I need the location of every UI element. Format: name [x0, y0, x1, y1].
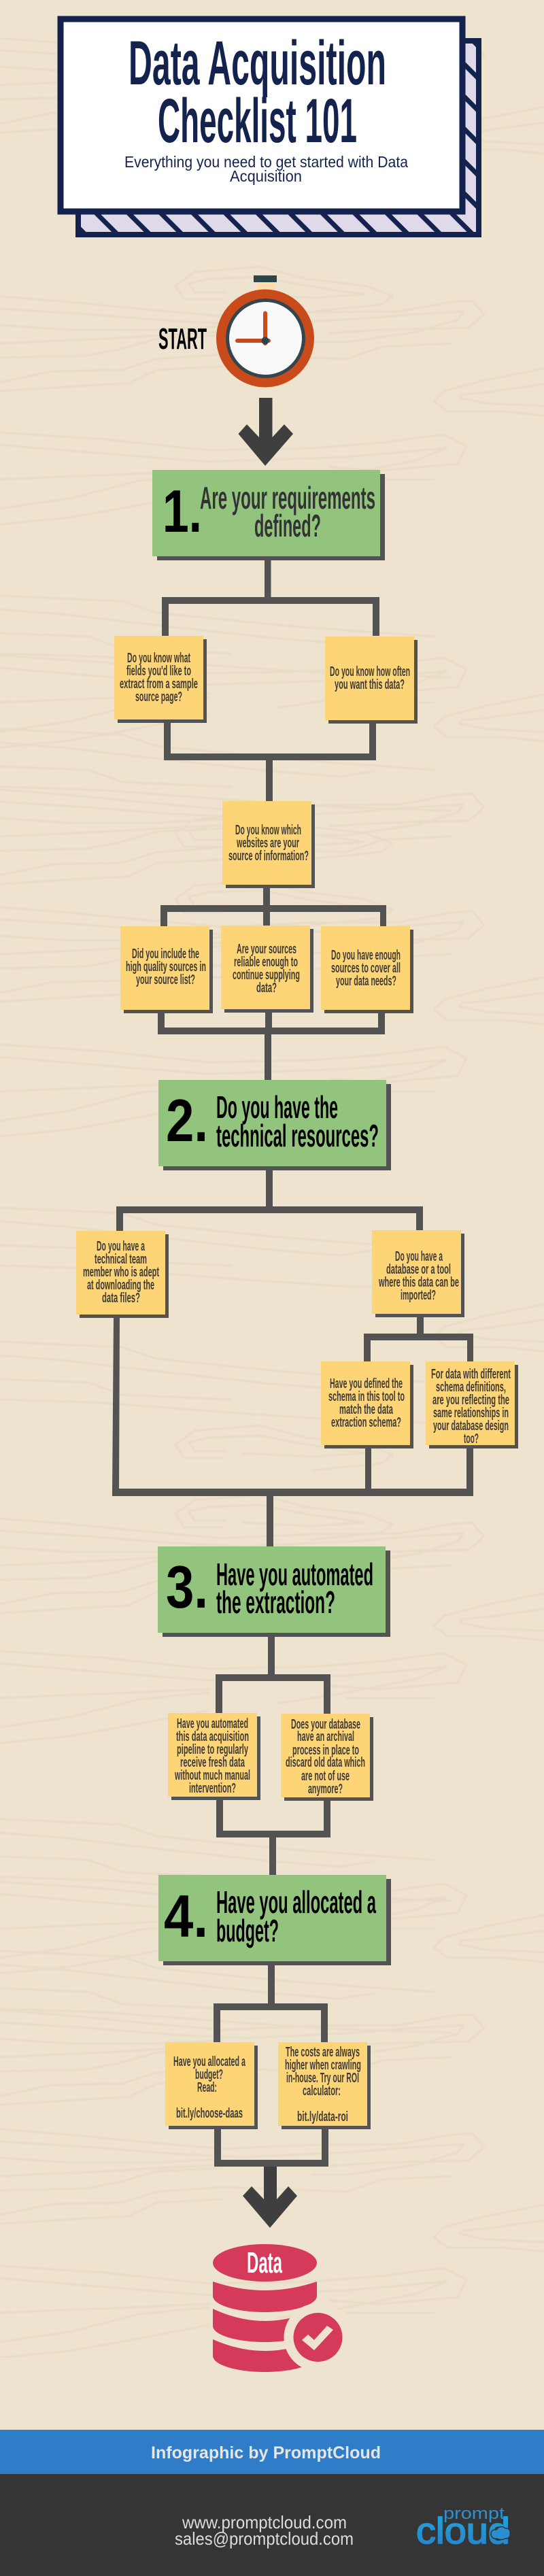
question: allocated budget: bit.ly/choose-daas: [176, 2106, 243, 2121]
question: high quality sources: [120, 926, 213, 1013]
step 4 number: 4.: [164, 1882, 208, 1950]
step 3 heading: the extraction?: [216, 1584, 335, 1620]
question: technical team member: technical team: [95, 1252, 147, 1267]
connectors: step 4 to questions: [214, 1965, 328, 2042]
connectors: step 4 questions to final arrow: [214, 2129, 328, 2167]
question: reliable sources: data?: [256, 981, 277, 996]
question: fields to extract: source page?: [135, 690, 182, 705]
question: enough sources: your data needs?: [336, 974, 396, 989]
step 3 heading: [216, 1557, 373, 1620]
question: database or tool: Do you have a: [395, 1249, 443, 1264]
question: schema defined: match the data: [339, 1402, 393, 1417]
question: archival process: are not of use: [301, 1769, 350, 1784]
connectors: step 1 to first questions: [162, 560, 379, 636]
question: reliable sources: reliable enough to: [234, 955, 298, 970]
question: reliable sources: continue supplying: [233, 968, 300, 983]
question: technical team member: [76, 1231, 169, 1318]
infographic canvas: START: [158, 322, 207, 356]
step 1 panel: [152, 470, 385, 560]
step 2 number: 2.: [166, 1087, 208, 1154]
question: enough sources: sources to cover all: [331, 961, 401, 976]
question: ROI calculator: in-house. Try our ROI: [286, 2071, 359, 2086]
question: archival process: Does your database: [291, 1717, 360, 1732]
question: technical team member: data files?: [102, 1291, 140, 1306]
question: ROI calculator: calculator:: [303, 2084, 341, 2099]
arrow: start to step 1: [238, 398, 293, 466]
question: reliable sources: [221, 926, 313, 1013]
step 4 panel: [158, 1875, 391, 1965]
question: allocated budget: Read:: [197, 2080, 217, 2095]
question: automated pipeline: [168, 1713, 260, 1800]
question: schema defined: extraction schema?: [331, 1415, 401, 1430]
step 1 heading: defined?: [254, 508, 321, 543]
step 3 heading: Have you automated: [216, 1557, 373, 1592]
question: which websites: [222, 801, 315, 888]
arrow: to data: [243, 2167, 297, 2228]
step 4 heading: [216, 1884, 376, 1948]
title panel: [61, 19, 462, 211]
connectors: sources question to three sub questions: [160, 888, 386, 926]
connectors: step 3 to questions: [216, 1637, 330, 1714]
subtitle: Everything you need to get started with Data: [124, 153, 408, 171]
question: how often: [325, 637, 418, 724]
title card: [61, 19, 479, 235]
connectors: step 2 questions to step 3: [112, 1317, 473, 1546]
question: archival process: discard old data which: [286, 1755, 365, 1770]
question: ROI calculator: The costs are always: [286, 2045, 360, 2060]
question: automated pipeline: receive fresh data: [180, 1755, 245, 1770]
database label: Data: [247, 2246, 282, 2280]
step 4 heading: budget?: [216, 1913, 279, 1948]
question: database or tool: imported?: [401, 1288, 436, 1303]
contact details: www.promptcloud.com: [182, 2512, 347, 2532]
question: allocated budget: Have you allocated a: [173, 2054, 245, 2069]
question: high quality sources: your source list?: [136, 972, 195, 987]
question: ROI calculator: bit.ly/data-roi: [297, 2109, 348, 2124]
question: different schema definitions: too?: [464, 1431, 479, 1446]
question: high quality sources: high quality sources in: [126, 960, 206, 975]
question: allocated budget: [165, 2042, 258, 2129]
title heading: [129, 29, 386, 156]
contact details: sales@promptcloud.com: [175, 2528, 354, 2549]
question: ROI calculator: higher when crawling: [285, 2058, 361, 2073]
subtitle: [124, 153, 408, 185]
credit band: [0, 2430, 544, 2474]
question: fields to extract: fields you'd like to: [126, 664, 191, 679]
contact details: [175, 2512, 354, 2549]
question: which websites: Do you know which: [235, 823, 301, 838]
question: schema defined: schema in this tool to: [328, 1389, 405, 1404]
question: database or tool: database or a tool: [386, 1262, 451, 1277]
question: technical team member: member who is adept: [83, 1265, 159, 1280]
step 4 heading: Have you allocated a: [216, 1884, 376, 1920]
step 3 number: 3.: [166, 1553, 208, 1621]
connectors: step 2 to questions: [116, 1170, 423, 1231]
question: schema defined: [321, 1361, 413, 1448]
question: archival process: process in place to: [292, 1743, 359, 1758]
question: database or tool: where this data can be: [378, 1275, 459, 1290]
question: automated pipeline: pipeline to regularly: [177, 1742, 248, 1757]
connectors: sub questions to step 2: [158, 1013, 385, 1080]
logo: PromptCloud: prompt: [443, 2505, 505, 2523]
question: enough sources: [321, 926, 413, 1013]
question: how often: you want this data?: [335, 677, 405, 692]
step 1 heading: [200, 480, 375, 543]
question: ROI calculator: [278, 2042, 371, 2129]
step 1 heading: Are your requirements: [200, 480, 375, 515]
question: technical team member: Do you have a: [97, 1239, 145, 1254]
footer band: [0, 2474, 544, 2576]
question: automated pipeline: Have you automated: [177, 1716, 248, 1731]
question: allocated budget: budget?: [195, 2067, 223, 2082]
connectors: first questions to sources question: [164, 723, 376, 801]
question: archival process: [281, 1714, 373, 1801]
question: schema defined: Have you defined the: [330, 1376, 403, 1391]
icon: database with check: [213, 2244, 352, 2372]
step 1 number: 1.: [163, 477, 202, 545]
step 2 heading: Do you have the: [216, 1089, 338, 1125]
question: different schema definitions: [426, 1361, 518, 1448]
question: how often: Do you know how often: [330, 664, 410, 679]
step 2 panel: [158, 1080, 391, 1170]
step 2 heading: [216, 1089, 379, 1153]
question: reliable sources: Are your sources: [237, 942, 296, 957]
logo: PromptCloud: cloud: [416, 2511, 510, 2552]
question: fields to extract: extract from a sample: [120, 677, 198, 692]
question: high quality sources: Did you include the: [132, 947, 199, 962]
question: which websites: websites are your: [236, 836, 299, 851]
question: fields to extract: Do you know what: [127, 651, 190, 666]
question: automated pipeline: intervention?: [189, 1781, 236, 1796]
question: archival process: anymore?: [308, 1782, 343, 1797]
question: which websites: source of information?: [228, 849, 309, 864]
credit band: Infographic by PromptCloud: [151, 2443, 381, 2462]
question: database or tool: [372, 1230, 464, 1317]
connectors: step 3 questions to step 4: [216, 1800, 330, 1875]
question: enough sources: Do you have enough: [331, 948, 401, 963]
question: archival process: have an archival: [297, 1729, 354, 1744]
question: automated pipeline: this data acquisition: [176, 1729, 249, 1744]
step 2 heading: technical resources?: [216, 1118, 379, 1153]
question: technical team member: at downloading the: [87, 1278, 154, 1293]
question: automated pipeline: without much manual: [174, 1768, 250, 1783]
step 3 panel: [158, 1546, 390, 1637]
question: fields to extract: [114, 636, 207, 723]
striped backing panel: [78, 41, 479, 235]
subtitle: Acquisition: [230, 167, 302, 185]
icon: stopwatch: [216, 275, 314, 388]
